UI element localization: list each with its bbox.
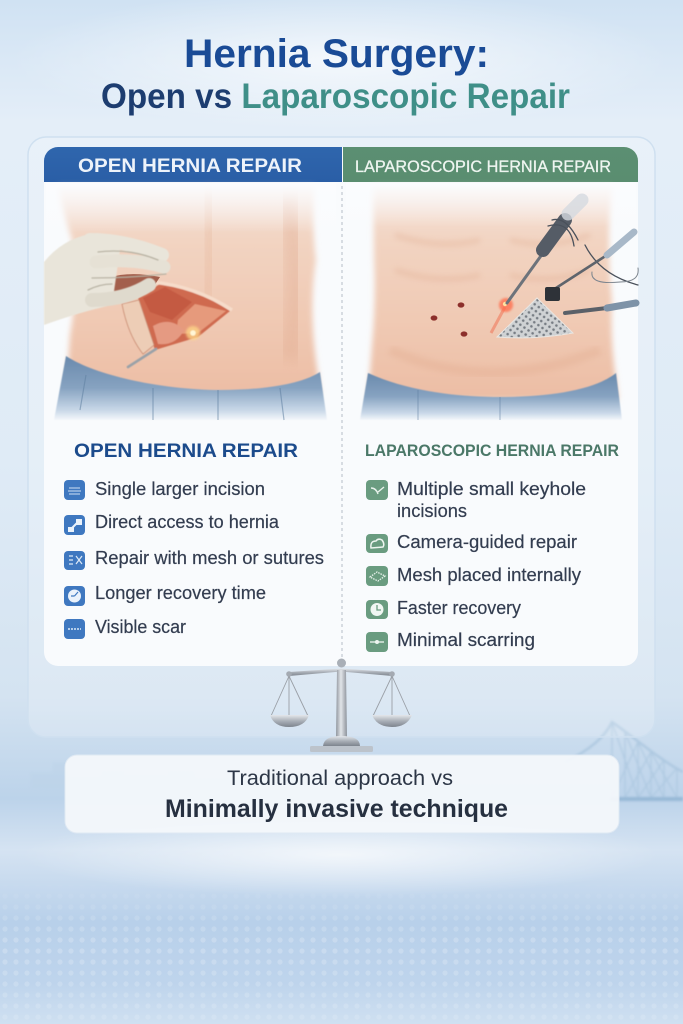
- item: visible scar: [64, 617, 186, 639]
- callout: [65, 755, 619, 833]
- title: [101, 32, 570, 116]
- item: visible scar: Visible scar: [95, 617, 186, 637]
- panel: open repair header: [44, 147, 342, 182]
- heading: laparoscopic repair: LAPAROSCOPIC HERNIA REPAIR: [365, 441, 619, 460]
- panel: laparoscopic repair header: [343, 147, 638, 182]
- heading: open repair: OPEN HERNIA REPAIR: [74, 441, 298, 462]
- keyhole incisions: [431, 302, 467, 337]
- item: repair with mesh: Repair with mesh or sutures: [95, 548, 324, 568]
- jeans: [360, 373, 622, 420]
- torso: [368, 186, 618, 400]
- outer translucent frame: [28, 137, 655, 737]
- torso: [58, 186, 320, 395]
- panel: open repair header: OPEN HERNIA REPAIR: [78, 156, 302, 177]
- item: keyhole incisions: Multiple small keyhole: [397, 479, 586, 499]
- fade over top of torso: [46, 183, 336, 233]
- item: longer recovery: Longer recovery time: [95, 583, 266, 603]
- title line 2: Open vs Laparoscopic Repair: [101, 77, 570, 116]
- fade over top of torso: [346, 183, 636, 227]
- jeans: [54, 356, 327, 420]
- item: minimal scarring: Minimal scarring: [397, 630, 535, 650]
- item: camera guided: Camera-guided repair: [397, 532, 577, 552]
- item: keyhole incisions: incisions: [397, 501, 467, 521]
- illustration: open hernia surgery: [44, 183, 336, 420]
- mesh holder tool: [565, 303, 636, 313]
- item: mesh placed: Mesh placed internally: [397, 565, 581, 585]
- comparison panel: [44, 147, 638, 666]
- grasper tool: [545, 232, 638, 301]
- gloved hand: [44, 233, 166, 325]
- open incision: [122, 282, 232, 367]
- callout line 1: Traditional approach vs: [227, 767, 453, 790]
- laser glow: [491, 298, 513, 333]
- panel: laparoscopic repair header: LAPAROSCOPIC HERNIA REPAIR: [355, 157, 611, 176]
- item: direct access: Direct access to hernia: [95, 512, 280, 532]
- white card: [44, 147, 638, 666]
- laparoscope: [507, 200, 638, 303]
- callout line 2: Minimally invasive technique: [165, 795, 508, 823]
- item: faster recovery: Faster recovery: [397, 598, 521, 618]
- list: open repair: [64, 479, 324, 639]
- icon: balance scale: [270, 658, 412, 752]
- title line 1: Hernia Surgery:: [184, 32, 489, 76]
- illustration: laparoscopic surgery: [346, 183, 638, 420]
- item: single larger incision: Single larger incision: [95, 479, 265, 499]
- list: laparoscopic repair: [366, 479, 586, 652]
- mesh patch: [497, 298, 573, 338]
- item: keyhole incisions: [366, 479, 586, 521]
- dark shadow under the lifted flap: [103, 274, 160, 292]
- background bridge: [565, 722, 683, 799]
